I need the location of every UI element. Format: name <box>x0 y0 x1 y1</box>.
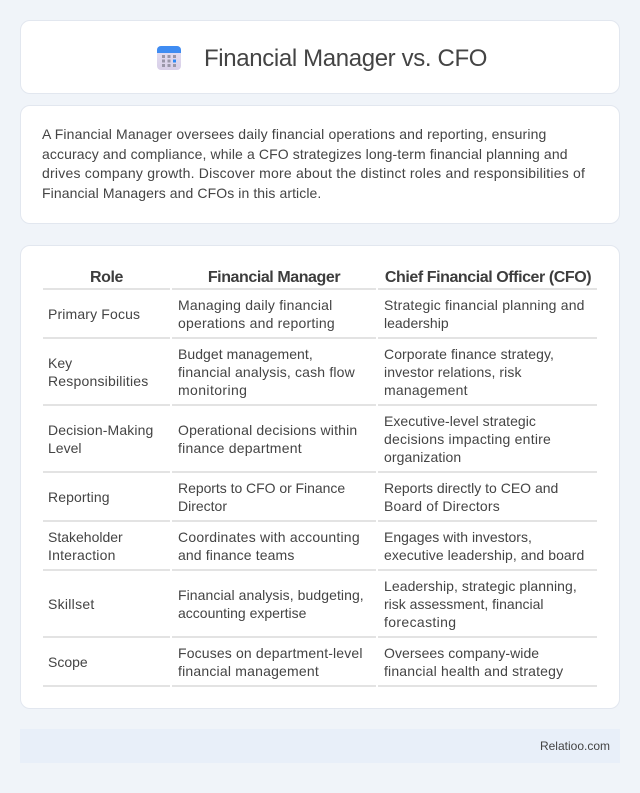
row: Key Responsibilities, CFO: Corporate finance strategy, <box>384 346 554 362</box>
row: Key Responsibilities, Financial Manager <box>178 346 355 398</box>
table panel <box>20 245 620 709</box>
row: Decision-Making Level, CFO: decisions impacting entire <box>384 431 551 447</box>
intro text: accuracy and compliance, while a CFO strategizes long-term financial planning and <box>42 146 568 162</box>
row: Scope, CFO <box>384 645 564 679</box>
row: Skillset, Financial Manager: Financial analysis, budgeting, <box>178 587 364 603</box>
row: Key Responsibilities label: Key <box>48 355 72 371</box>
row: Skillset, Financial Manager: accounting expertise <box>178 605 306 621</box>
row: Decision-Making Level label: Level <box>48 440 81 456</box>
row: Reporting label: Reporting <box>48 489 110 505</box>
row: Skillset, CFO <box>384 578 577 630</box>
row: Decision-Making Level, CFO: organization <box>384 449 461 465</box>
row: Key Responsibilities, CFO: investor relations, risk <box>384 364 522 380</box>
intro panel <box>20 105 620 224</box>
row: Stakeholder Interaction, Financial Manager: Coordinates with accounting <box>178 529 360 545</box>
row: Reporting, CFO <box>384 480 558 514</box>
row: Stakeholder Interaction, CFO <box>384 529 584 563</box>
row: Skillset, CFO: Leadership, strategic planning, <box>384 578 577 594</box>
column heading: CFO: Chief Financial Officer (CFO) <box>385 269 591 286</box>
row: Decision-Making Level label <box>48 422 153 456</box>
row: Key Responsibilities, CFO: management <box>384 382 468 398</box>
row: Decision-Making Level, Financial Manager: finance department <box>178 440 302 456</box>
row: Decision-Making Level label: Decision-Making <box>48 422 153 438</box>
row: Primary Focus, Financial Manager <box>178 297 335 331</box>
row: Skillset, Financial Manager <box>178 587 364 621</box>
row: Decision-Making Level, CFO: Executive-level strategic <box>384 413 536 429</box>
row: Skillset, CFO: forecasting <box>384 614 456 630</box>
header panel <box>20 20 620 94</box>
row: Stakeholder Interaction label: Stakeholder <box>48 529 123 545</box>
title: Financial Manager vs. CFO <box>204 45 487 72</box>
row: Key Responsibilities label <box>48 355 148 389</box>
row: Primary Focus, Financial Manager: operations and reporting <box>178 315 335 331</box>
row: Reporting, Financial Manager <box>178 480 345 514</box>
row: Reporting, CFO: Board of Directors <box>384 498 500 514</box>
row: Scope label: Scope <box>48 654 88 670</box>
row: Primary Focus, CFO: leadership <box>384 315 449 331</box>
row: Primary Focus label: Primary Focus <box>48 306 140 322</box>
icon: calendar <box>157 46 181 70</box>
row: Key Responsibilities, Financial Manager: financial analysis, cash flow <box>178 364 355 380</box>
row: Stakeholder Interaction label <box>48 529 123 563</box>
row: Skillset label: Skillset <box>48 596 95 612</box>
row: Key Responsibilities label: Responsibilities <box>48 373 148 389</box>
column heading: Financial Manager: Financial Manager <box>208 269 340 286</box>
footer bar <box>20 729 620 763</box>
row: Scope, Financial Manager: Focuses on department-level <box>178 645 363 661</box>
row: Stakeholder Interaction, CFO: Engages with investors, <box>384 529 532 545</box>
row: Primary Focus, CFO: Strategic financial planning and <box>384 297 585 313</box>
row: Key Responsibilities, CFO <box>384 346 554 398</box>
intro text <box>42 126 585 201</box>
table <box>43 268 598 687</box>
row: Stakeholder Interaction, CFO: executive leadership, and board <box>384 547 584 563</box>
row: Stakeholder Interaction, Financial Manager: and finance teams <box>178 547 294 563</box>
row: Scope, CFO: Oversees company-wide <box>384 645 539 661</box>
row: Stakeholder Interaction, Financial Manager <box>178 529 360 563</box>
row: Decision-Making Level, Financial Manager <box>178 422 357 456</box>
row: Decision-Making Level, CFO <box>384 413 551 465</box>
row: Decision-Making Level, Financial Manager: Operational decisions within <box>178 422 357 438</box>
intro text: drives company growth. Discover more about the distinct roles and responsibilities of <box>42 165 585 181</box>
row: Primary Focus, CFO <box>384 297 585 331</box>
intro text: Financial Managers and CFOs in this article. <box>42 184 321 200</box>
row: Primary Focus, Financial Manager: Managing daily financial <box>178 297 332 313</box>
row: Reporting, Financial Manager: Reports to CFO or Finance <box>178 480 345 496</box>
row: Key Responsibilities, Financial Manager: monitoring <box>178 382 247 398</box>
row: Skillset, CFO: risk assessment, financial <box>384 596 544 612</box>
row: Reporting, CFO: Reports directly to CEO and <box>384 480 558 496</box>
row: Scope, Financial Manager <box>178 645 363 679</box>
row: Key Responsibilities, Financial Manager: Budget management, <box>178 346 313 362</box>
row: Scope, CFO: financial health and strategy <box>384 663 563 679</box>
row: Scope, Financial Manager: financial management <box>178 663 319 679</box>
column heading: Role: Role <box>90 269 123 286</box>
footer text: Relatioo.com <box>540 739 610 753</box>
intro text: A Financial Manager oversees daily financial operations and reporting, ensuring <box>42 126 546 142</box>
row: Reporting, Financial Manager: Director <box>178 498 227 514</box>
row: Stakeholder Interaction label: Interaction <box>48 547 116 563</box>
